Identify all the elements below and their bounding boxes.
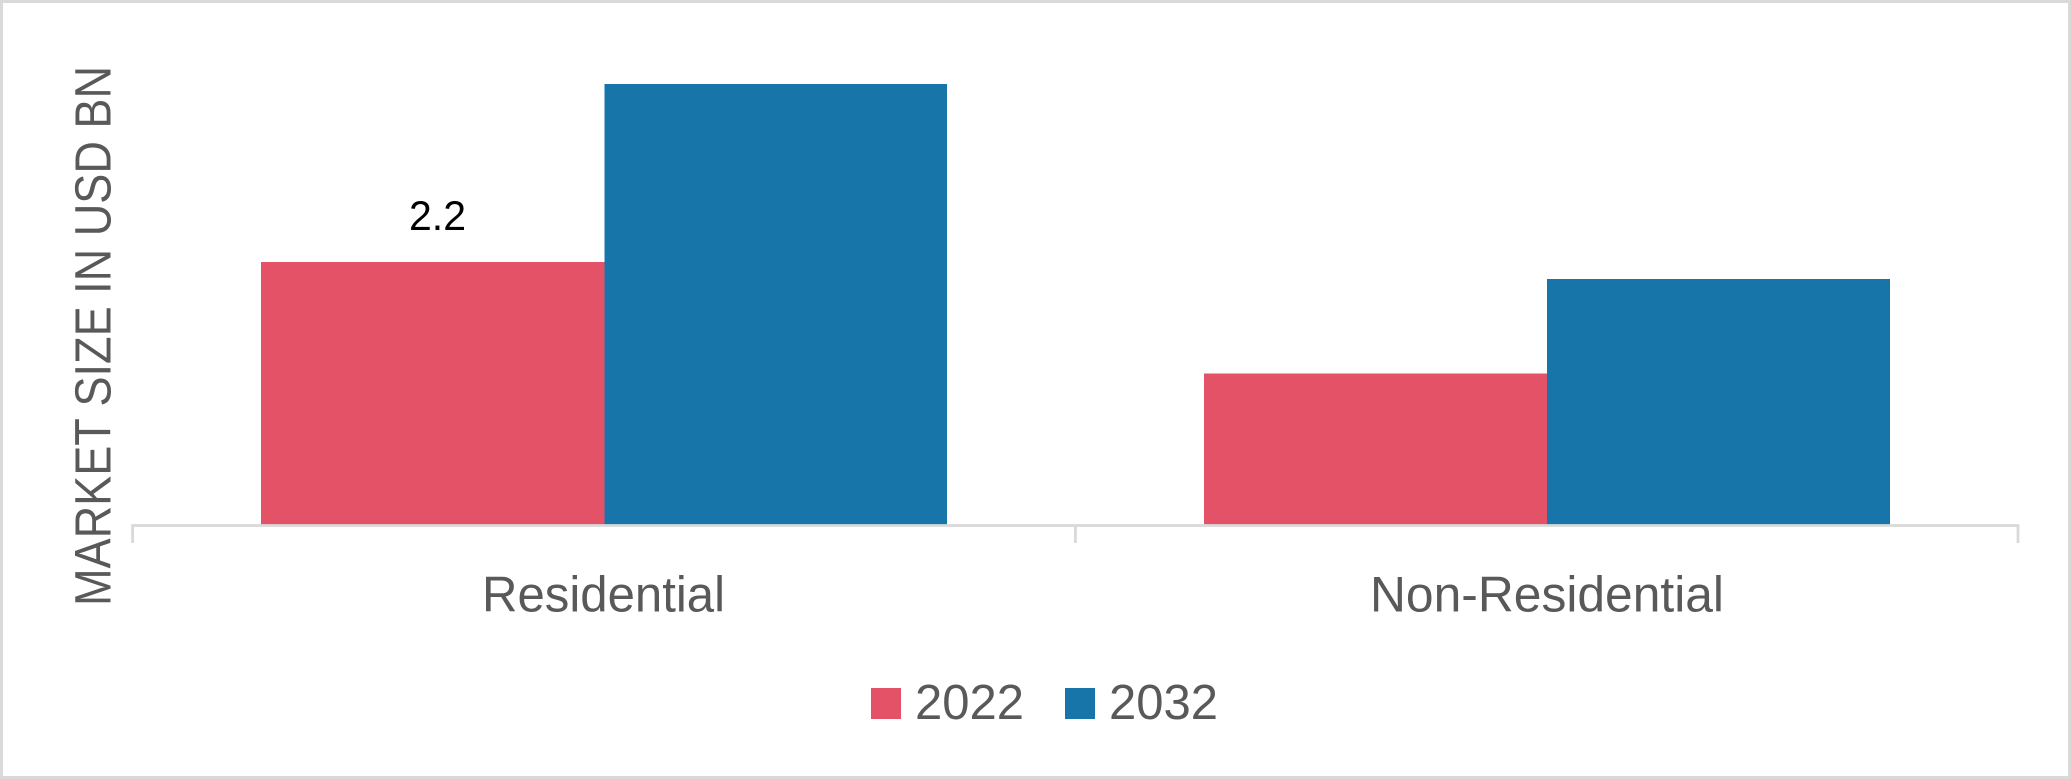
legend	[871, 676, 1218, 730]
bar: Non-Residential 2032	[1547, 279, 1890, 524]
bar: Residential 2022	[261, 262, 604, 524]
data label: 2.2: 2.2	[409, 192, 466, 239]
legend swatch: 2032	[1065, 688, 1095, 719]
bar: Non-Residential 2022	[1204, 374, 1547, 524]
category label: Residential: Residential	[482, 567, 725, 623]
category label: Non-Residential: Non-Residential	[1370, 567, 1724, 623]
legend label: 2032: 2032	[1109, 676, 1218, 730]
y-axis title: MARKET SIZE IN USD BN	[64, 66, 122, 606]
x axis with ticks	[133, 526, 2018, 543]
legend label: 2022: 2022	[915, 676, 1024, 730]
legend swatch: 2022	[871, 688, 901, 719]
bar: Residential 2032	[604, 84, 947, 524]
